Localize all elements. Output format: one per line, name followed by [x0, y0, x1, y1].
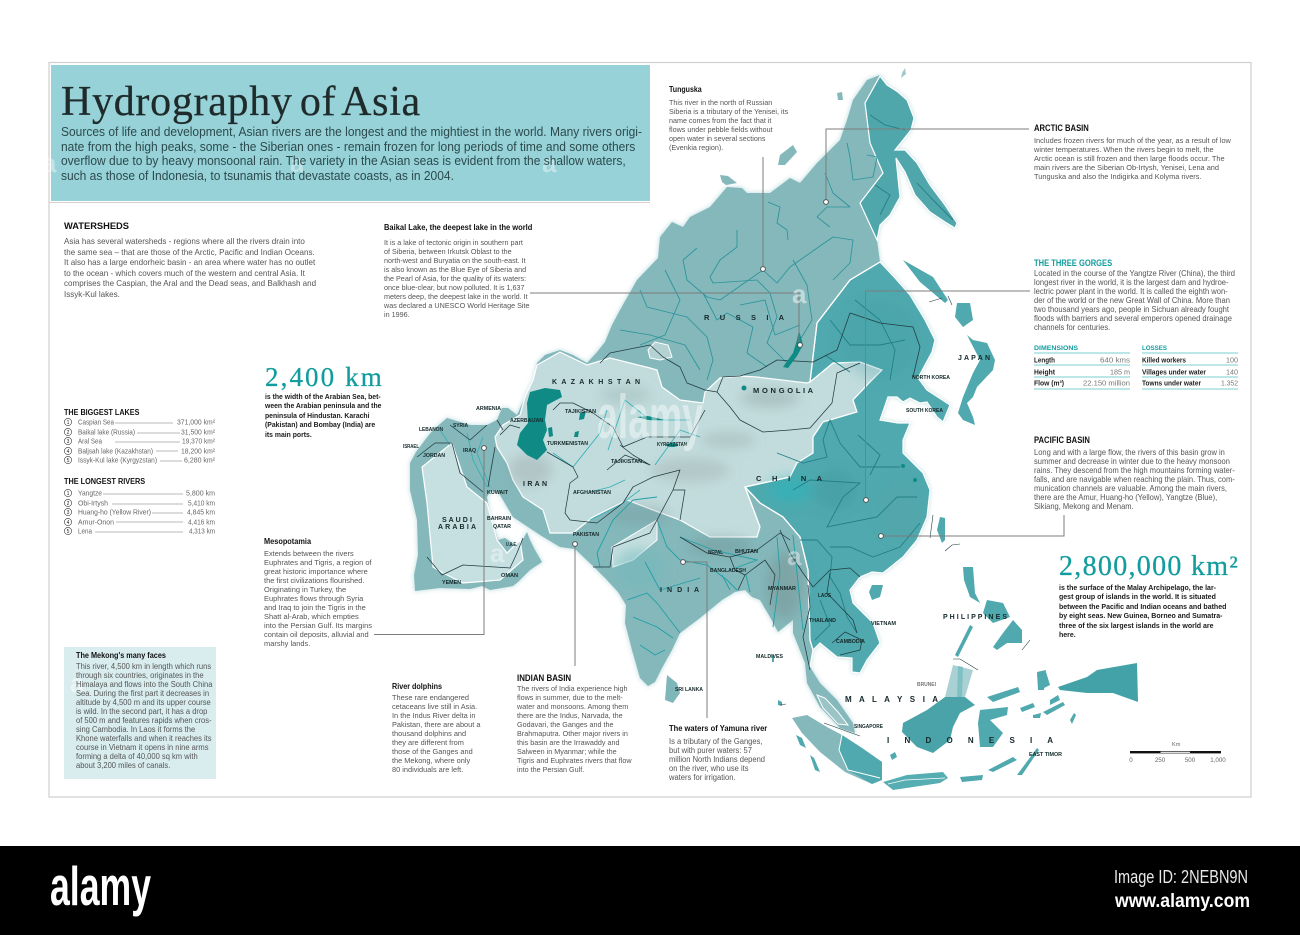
footer band: alamy: [50, 855, 151, 917]
endorheic basin: central Asia: [495, 352, 882, 537]
country labels: K A Z A K H S T A N: [552, 379, 640, 386]
footer band: [0, 846, 1300, 935]
small country labels: BAHRAIN: [487, 516, 511, 522]
text: Arctic basin: Arctic ocean is still frozen and then large floods occur. The: [1034, 154, 1225, 162]
table: losses: 140: [1226, 368, 1238, 376]
heading: Pacific basin: PACIFIC BASIN: [1034, 435, 1090, 445]
alamy watermarks: a: [542, 148, 557, 178]
rivers: India, Himalaya, Myanmar: [597, 497, 803, 655]
list: the biggest lakes: 371,000 km²: [177, 418, 216, 426]
text: Indian basin: into the Persian Gulf.: [517, 764, 584, 774]
country labels: I N D I A: [660, 587, 699, 594]
small country labels: IRAQ: [463, 448, 476, 454]
list: the longest rivers: 5,800 km: [186, 488, 215, 498]
list: the longest rivers: [64, 488, 215, 536]
table: dimensions: Length: [1034, 358, 1055, 364]
small country labels: BHUTAN: [735, 549, 758, 555]
country labels: [438, 313, 1053, 745]
small country labels: ARMENIA: [476, 406, 501, 412]
leader: Baikal: [530, 293, 799, 345]
list: the biggest lakes: Issyk-Kul lake (Kyrgyzstan): [78, 456, 157, 464]
alamy watermarks: [42, 148, 807, 698]
text: river dolphins: These rare endangered: [392, 692, 469, 702]
text: Pacific basin: [1034, 448, 1235, 510]
mainland base: Arctic and Indian basins: [410, 75, 957, 733]
text: Mekong: course in Vietnam it opens in nine arms: [76, 742, 208, 752]
heading: Yamuna: The waters of Yamuna river: [668, 723, 767, 733]
islands: Sumatra and Java: [792, 715, 948, 790]
scale bar: 250: [1155, 757, 1166, 764]
country labels: C H I N A: [756, 474, 823, 483]
footer band: www.alamy.com: [1114, 891, 1250, 912]
text: the three gorges: longest river in the world, it is the largest dam and hydroe-: [1034, 278, 1229, 286]
small country labels: CAMBODIA: [836, 639, 865, 645]
text: Tunguska: [669, 98, 788, 152]
text: Indian basin: water and monsoons. Among them: [517, 702, 628, 710]
map of Asia: [410, 68, 1138, 790]
heading: watersheds: WATERSHEDS: [64, 221, 129, 232]
text: river dolphins: thousand dolphins and: [392, 728, 466, 738]
text: Pacific basin: there are the Amur, Huang-ho (Yellow), Yangtze (Blue),: [1034, 492, 1217, 502]
Pacific basin: east Asia: [745, 262, 950, 673]
list: the biggest lakes: 2: [67, 430, 70, 436]
text: Arctic basin: Tunguska and also the Indigirka and Kolyma rivers.: [1034, 172, 1202, 180]
text: river dolphins: Pakistan, there are about a: [392, 720, 480, 728]
leader: Three Gorges: [866, 291, 1030, 500]
heading: longest rivers: THE LONGEST RIVERS: [64, 476, 145, 486]
text: Mesopotamia: Originating in Turkey, the: [264, 584, 346, 594]
small country labels: THAILAND: [809, 618, 836, 624]
alamy watermarks: a: [70, 668, 85, 698]
text: Indian basin: flows in summer, due to the melt-: [517, 692, 623, 702]
shaded relief: [506, 361, 883, 619]
table: losses: Villages under water: [1142, 370, 1206, 376]
land halo: [410, 75, 957, 733]
table: dimensions: 185 m: [1110, 368, 1130, 376]
small country labels: QATAR: [493, 524, 511, 530]
table: losses: 100: [1226, 356, 1238, 364]
text: river dolphins: 80 individuals are left.: [392, 764, 463, 774]
list: the longest rivers: 2: [67, 501, 70, 507]
list: the biggest lakes: 18,200 km²: [181, 446, 216, 456]
small country labels: NORTH KOREA: [912, 375, 950, 381]
country labels: R U S S I A: [704, 313, 785, 322]
text: Baikal Lake: It is a lake of tectonic origin in southern part: [384, 238, 523, 247]
islands: Borneo: [902, 665, 975, 753]
small country labels: BRUNEI: [917, 682, 936, 688]
country labels: J A P A N: [958, 355, 990, 362]
scale bar: 1,000: [1210, 757, 1226, 764]
text: Baikal Lake: the Pearl of Asia, for the quality of its waters:: [384, 274, 526, 283]
text: Mekong: altitude by 4,500 m and its upper course: [76, 698, 211, 706]
title: Hydrography of Asia: [61, 79, 421, 125]
text: Yamuna: waters for irrigation.: [668, 772, 735, 782]
text: watersheds: [64, 236, 316, 298]
text: Mekong: about 3,200 miles of canals.: [76, 760, 170, 770]
small country labels: TURKMENISTAN: [547, 441, 588, 447]
small country labels: SYRIA: [453, 423, 468, 429]
text: arabian sea: ween the Arabian peninsula and the: [264, 402, 381, 410]
Pacific basin: north east Siberia: [860, 76, 957, 240]
heading: biggest lakes: THE BIGGEST LAKES: [64, 407, 139, 417]
text: Mekong: Khone waterfalls and when it reaches its: [76, 734, 212, 742]
rivers: [620, 143, 877, 380]
rivers: central Asia and Middle East: [440, 400, 700, 520]
text: Mesopotamia: Extends between the rivers: [264, 548, 354, 558]
text: Mesopotamia: Euphrates and Tigris, a region of: [264, 558, 372, 566]
list: the biggest lakes: 5: [67, 458, 70, 464]
text: Tunguska: open water in several sections: [669, 134, 765, 142]
endorheic patches in Siberia: [648, 342, 672, 360]
text: Baikal Lake: was declared a UNESCO World Heritage Site: [384, 301, 530, 310]
text: Indian basin: Salween in Myanmar; while the: [517, 746, 617, 756]
text: malay archipelago: here.: [1059, 630, 1076, 639]
text: the three gorges: two thousand years ago, people in Sichuan already fought: [1034, 304, 1229, 314]
text: river dolphins: they are different from: [392, 738, 464, 746]
intro paragraph: nate from the high peaks, some - the Siberian ones - remain frozen for long periods of time and some others: [61, 140, 635, 154]
text: Mesopotamia: great historic importance where: [264, 566, 368, 576]
text: the three gorges: der of the world or the new Great Wall of China. More than: [1034, 296, 1230, 304]
text: malay archipelago: by eight seas. New Guinea, Borneo and Sumatra-: [1059, 611, 1222, 620]
rivers: China and south east Asia: [777, 115, 953, 640]
table: dimensions: 22.150 million: [1083, 378, 1130, 388]
text: Arctic basin: main rivers are the Siberian Ob-Irtysh, Yenisei, Lena and: [1034, 162, 1219, 172]
islands: Philippines: [955, 567, 1022, 657]
text: Baikal Lake: [384, 238, 530, 319]
text: the three gorges: lectric power plant in the world. It is called the eighth won-: [1034, 286, 1228, 296]
text: watersheds: It also has a large endorheic basin - an area where water has no outlet: [64, 257, 315, 267]
table: losses: 1.352: [1221, 378, 1238, 388]
lakes: Caspian Sea: [517, 388, 562, 460]
table: losses: Killed workers: [1142, 358, 1186, 364]
leader: Pacific basin: [881, 515, 1064, 536]
text: Mesopotamia: [264, 548, 372, 648]
Mekong box background: [64, 647, 216, 779]
text: Tunguska: name comes from the fact that it: [669, 116, 771, 124]
small country labels: KUWAIT: [487, 490, 509, 496]
text: Pacific basin: munication channels are valuable. Among the main rivers,: [1034, 484, 1227, 492]
intro paragraph: Sources of life and development, Asian rivers are the longest and the mightiest in the world. Many rivers origi-: [61, 125, 642, 139]
text: malay archipelago: between the Pacific and Indian oceans and bathed: [1059, 602, 1226, 611]
text: Tunguska: Siberia is a tributary of the Yenisei, its: [669, 106, 788, 116]
text: Yamuna: on the river, who use its: [668, 764, 748, 772]
scale bar: Km: [1172, 742, 1181, 748]
text: the three gorges: floods with barriers and several emperors opened drainage: [1034, 314, 1232, 322]
table: dimensions: [1034, 345, 1130, 389]
text: malay archipelago: [1059, 582, 1226, 639]
heading: Indian basin: INDIAN BASIN: [517, 673, 571, 683]
text: arabian sea: (Pakistan) and Bombay (India) are: [264, 421, 375, 429]
text: Mesopotamia: and Iraq to join the Tigris in the: [264, 602, 366, 612]
text: Indian basin: Brahmaputra. Other major rivers in: [517, 728, 628, 738]
text: Mekong: sing Cambodia. In Laos it forms the: [76, 724, 195, 734]
text: Indian basin: The rivers of India experience high: [517, 684, 627, 692]
marker dots: [482, 200, 883, 564]
country labels: M A L A Y S I A: [845, 695, 938, 704]
list: the biggest lakes: 4: [67, 449, 70, 455]
text: river dolphins: those of the Ganges and: [392, 746, 473, 756]
table: losses: LOSSES: [1142, 345, 1167, 352]
sea border marks: [780, 296, 1030, 736]
table: losses: Towns under water: [1142, 380, 1201, 388]
table: dimensions: 640 kms: [1100, 356, 1130, 364]
leader: Tunguska: [762, 157, 764, 269]
list: the biggest lakes: 3: [67, 439, 70, 445]
text: Baikal Lake: meters deep, the deepest lake in the world. It: [384, 292, 528, 301]
text: Mekong: of 500 m and features rapids when cros-: [76, 716, 212, 724]
text: Mesopotamia: contain oil deposits, alluvial and: [264, 630, 369, 638]
text: Indian basin: [517, 684, 632, 774]
list: the longest rivers: Huang-ho (Yellow River): [78, 508, 151, 516]
list: the longest rivers: Amur-Onon: [78, 518, 114, 526]
text: Arctic basin: [1034, 136, 1231, 180]
small country labels: SRI LANKA: [675, 687, 703, 693]
scale bar: [1129, 742, 1226, 764]
small country labels: MALDIVES: [756, 654, 783, 660]
country labels: I R A N: [523, 481, 547, 488]
list: the biggest lakes: [64, 418, 216, 464]
text: malay archipelago: three of the six largest islands in the world are: [1059, 621, 1214, 630]
small country labels: ISRAEL: [403, 444, 420, 450]
heading: Mesopotamia: Mesopotamia: [264, 537, 311, 546]
national borders: [417, 313, 920, 670]
text: Baikal Lake: once blue-clear, but now polluted. It is 1,637: [384, 283, 525, 292]
text: Mesopotamia: marshy lands.: [264, 638, 310, 648]
text: Baikal Lake: in 1996.: [384, 310, 410, 319]
small country labels: AFGHANISTAN: [573, 490, 611, 496]
list: the biggest lakes: Aral Sea: [78, 436, 102, 446]
list: the longest rivers: 5: [67, 529, 70, 535]
alamy watermarks: a: [787, 541, 802, 571]
text: river dolphins: the Mekong, where only: [392, 756, 470, 764]
title panel background: [51, 65, 650, 201]
leader: Indian basin: [574, 544, 576, 666]
small country labels: TAJIKISTAN: [611, 459, 642, 465]
text: watersheds: comprises the Caspian, the Aral and the Dead seas, and Balkhash and: [64, 278, 316, 288]
small country labels: MYANMAR: [768, 586, 796, 592]
text: the three gorges: [1034, 268, 1235, 332]
text: Indian basin: Godavari, the Ganges and the: [517, 720, 613, 728]
text: the three gorges: Located in the course of the Yangtze River (China), the third: [1034, 268, 1235, 278]
list: the biggest lakes: 1: [67, 420, 70, 426]
text: watersheds: the same sea – that are those of the Arctic, Pacific and Indian Oceans.: [64, 246, 315, 256]
text: malay archipelago: is the surface of the Malay Archipelago, the lar-: [1059, 582, 1216, 592]
small country labels: JORDAN: [423, 453, 445, 459]
list: the longest rivers: 4,313 km: [189, 526, 215, 536]
small country labels: BANGLADESH: [710, 568, 746, 574]
text: Baikal Lake: north-west and Buryatia on the south-east. It: [384, 256, 526, 265]
country labels: P H I L I P P I N E S: [943, 614, 1007, 621]
text: arabian sea: its main ports.: [264, 430, 311, 438]
intro paragraph: such as those of Indonesia, to tsunamis that devastate coasts, as in 2004.: [61, 169, 454, 183]
intro paragraph: overflow due to by heavy monsoonal rain. The variety in the Asian seas is evident from the shallow waters,: [61, 154, 626, 168]
heading: the three gorges: THE THREE GORGES: [1034, 258, 1112, 268]
small country labels: NEPAL: [708, 550, 724, 556]
text: Mesopotamia: Euphrates flows through Syria: [264, 594, 363, 602]
footer band: Image ID: 2NEBN9N: [1114, 867, 1248, 887]
scale bar: 500: [1185, 757, 1196, 764]
text: Baikal Lake: is also known as the Blue Eye of Siberia and: [384, 265, 526, 274]
text: Mekong: forming a delta of 40,000 sq km with: [76, 752, 198, 760]
text: arabian sea: [264, 392, 382, 438]
big number: arabian sea: 2,400 km: [265, 362, 384, 392]
text: Indian basin: this basin are the Irrawaddy and: [517, 738, 619, 746]
text: Mekong: [76, 662, 212, 770]
list: the longest rivers: 1: [67, 491, 70, 497]
small country labels: AZERBAIJAN: [510, 418, 543, 424]
text: Mekong: is wild. In the second part, it has a drop: [76, 706, 207, 716]
alamy watermarks: a: [42, 148, 57, 178]
text: Yamuna: [668, 736, 765, 782]
text: watersheds: Asia has several watersheds - regions where all the rivers drain into: [64, 236, 305, 246]
leader: Yamuna: [683, 562, 707, 718]
small country labels: EAST TIMOR: [1029, 752, 1062, 758]
list: the biggest lakes: Baljsah lake (Kazakhstan): [78, 446, 153, 456]
text: Arctic basin: winter temperatures. When the rivers begin to melt, the: [1034, 144, 1214, 154]
table: dimensions: Height: [1034, 370, 1056, 376]
heading: river dolphins: River dolphins: [392, 682, 442, 691]
text: Mekong: Sea. During the first part it decreases in: [76, 688, 209, 698]
country labels: S A U D I: [442, 517, 472, 524]
table: dimensions: Flow (m³): [1034, 380, 1064, 388]
intro paragraph: [61, 125, 642, 183]
alamy watermarks: a: [792, 279, 807, 309]
text: Yamuna: million North Indians depend: [668, 754, 765, 764]
table: dimensions: DIMENSIONS: [1034, 345, 1078, 352]
text: Indian basin: there are the Indus, Narvada, the: [517, 710, 623, 720]
text: arabian sea: is the width of the Arabian Sea, bet-: [264, 392, 380, 400]
small country labels: [403, 375, 1062, 758]
text: watersheds: Issyk-Kul lakes.: [64, 288, 120, 298]
small country labels: LAOS: [818, 593, 831, 599]
text: watersheds: to the ocean - which covers much of the western and central Asia. It: [64, 268, 305, 278]
list: the biggest lakes: 6,280 km²: [184, 456, 216, 464]
text: river dolphins: In the Indus River delta in: [392, 710, 476, 720]
text: malay archipelago: gest group of islands in the world. It is situated: [1059, 592, 1216, 601]
leader: Mesopotamia: [374, 448, 484, 634]
islands: Japan, Sakhalin, Taiwan, Hainan, Sri Lanka: [665, 68, 995, 703]
small country labels: SOUTH KOREA: [906, 408, 943, 414]
basin divide lines: [745, 262, 880, 667]
alamy watermarks: alamy: [597, 383, 703, 452]
text: Indian basin: Tigris and Euphrates rivers that flow: [517, 756, 632, 764]
Moluccas: [1037, 672, 1060, 705]
leader lines with markers: [374, 129, 1064, 718]
list: the longest rivers: Yangtze: [78, 488, 102, 498]
islands: New Guinea: [1058, 663, 1138, 702]
list: the biggest lakes: 31,500 km²: [181, 428, 216, 436]
text: Mesopotamia: Shatt al-Arab, which empties: [264, 612, 359, 620]
small country labels: KYRGYZSTAN: [657, 442, 687, 448]
heading: Arctic basin: ARCTIC BASIN: [1034, 123, 1089, 133]
small country labels: YEMEN: [442, 580, 461, 586]
list: the longest rivers: 4: [67, 520, 70, 526]
endorheic basin: Arabian interior: [422, 443, 523, 583]
islands: eastern Indonesia: [772, 655, 1076, 782]
text: Yamuna: but with purer waters: 57: [668, 746, 751, 754]
big number: malay archipelago: 2,800,000 km²: [1059, 551, 1239, 582]
list: the biggest lakes: Baikal lake (Russia): [78, 428, 135, 436]
page frame: [49, 62, 1251, 797]
country labels: A R A B I A: [438, 524, 476, 531]
text: river dolphins: cetaceans live still in Asia.: [392, 702, 477, 710]
text: Pacific basin: Long and with a large flow, the rivers of this basin grow in: [1034, 448, 1225, 456]
text: Pacific basin: Sikiang, Mekong and Menam.: [1034, 502, 1134, 510]
alamy watermarks: a: [490, 538, 505, 568]
Peninsular Malaysia basin overlay: [817, 695, 848, 725]
list: the longest rivers: 4,845 km: [187, 508, 215, 516]
small country labels: SINGAPORE: [854, 724, 883, 730]
text: Mekong: Himalaya and flows into the South China: [76, 680, 212, 688]
endorheic basin: Thar desert: [612, 520, 657, 567]
leader: Arctic basin: [826, 129, 1029, 202]
text: the three gorges: channels for centuries.: [1034, 322, 1110, 332]
text: Pacific basin: falls, and are navigable when reaching the plain. Thus, com-: [1034, 474, 1235, 484]
alamy watermarks: a: [290, 148, 305, 178]
small country labels: LEBANON: [419, 427, 443, 433]
lakes: Aral, Balkhash, Issyk-Kul, Baikal: [548, 330, 917, 482]
text: Arctic basin: Includes frozen rivers for much of the year, as a result of low: [1034, 136, 1231, 144]
text: Tunguska: (Evenkia region).: [669, 142, 723, 152]
list: the longest rivers: 4,416 km: [188, 518, 215, 526]
small country labels: OMAN: [501, 573, 518, 579]
small country labels: U.A.E.: [506, 542, 517, 548]
text: Mekong: This river, 4,500 km in length which runs: [76, 662, 211, 670]
text: Tunguska: flows under pebble fields without: [669, 124, 773, 134]
small country labels: VIETNAM: [871, 621, 897, 627]
list: the biggest lakes: 19,370 km²: [182, 436, 216, 446]
text: Pacific basin: rains. They descend from the high mountains forming water-: [1034, 466, 1235, 474]
list: the longest rivers: Lena: [78, 526, 92, 536]
text: arabian sea: peninsula of Hindustan. Karachi: [264, 412, 369, 420]
text: Pacific basin: summer and decrease in winter due to the heavy monsoon: [1034, 456, 1230, 466]
list: the longest rivers: 5,410 km: [188, 498, 215, 508]
text: river dolphins: [392, 692, 480, 774]
text: Mekong: through six countries, originates in the: [76, 670, 204, 680]
scale bar: 0: [1129, 757, 1133, 764]
list: the biggest lakes: Caspian Sea: [78, 418, 114, 426]
small country labels: PAKISTAN: [573, 532, 599, 538]
country labels: M O N G O L I A: [753, 386, 814, 395]
text: Yamuna: Is a tributary of the Ganges,: [668, 736, 762, 746]
text: Tunguska: This river in the north of Russian: [669, 98, 772, 106]
heading: Baikal Lake: Baikal Lake, the deepest lake in the world: [384, 223, 532, 232]
list: the longest rivers: Obi-Irtysh: [78, 498, 108, 508]
table: losses: [1142, 345, 1238, 389]
text: Mesopotamia: the first civilizations flourished.: [264, 576, 364, 584]
heading: Tunguska: Tunguska: [669, 85, 702, 94]
country labels: I N D O N E S I A: [887, 736, 1053, 745]
small country labels: TAJIKISTAN: [565, 409, 596, 415]
heading: Mekong: The Mekong's many faces: [76, 651, 166, 660]
text: Baikal Lake: of Siberia, between Irkutsk Oblast to the: [384, 247, 512, 256]
text: Mesopotamia: into the Persian Gulf. Its margins: [264, 620, 372, 630]
list: the longest rivers: 3: [67, 510, 70, 516]
